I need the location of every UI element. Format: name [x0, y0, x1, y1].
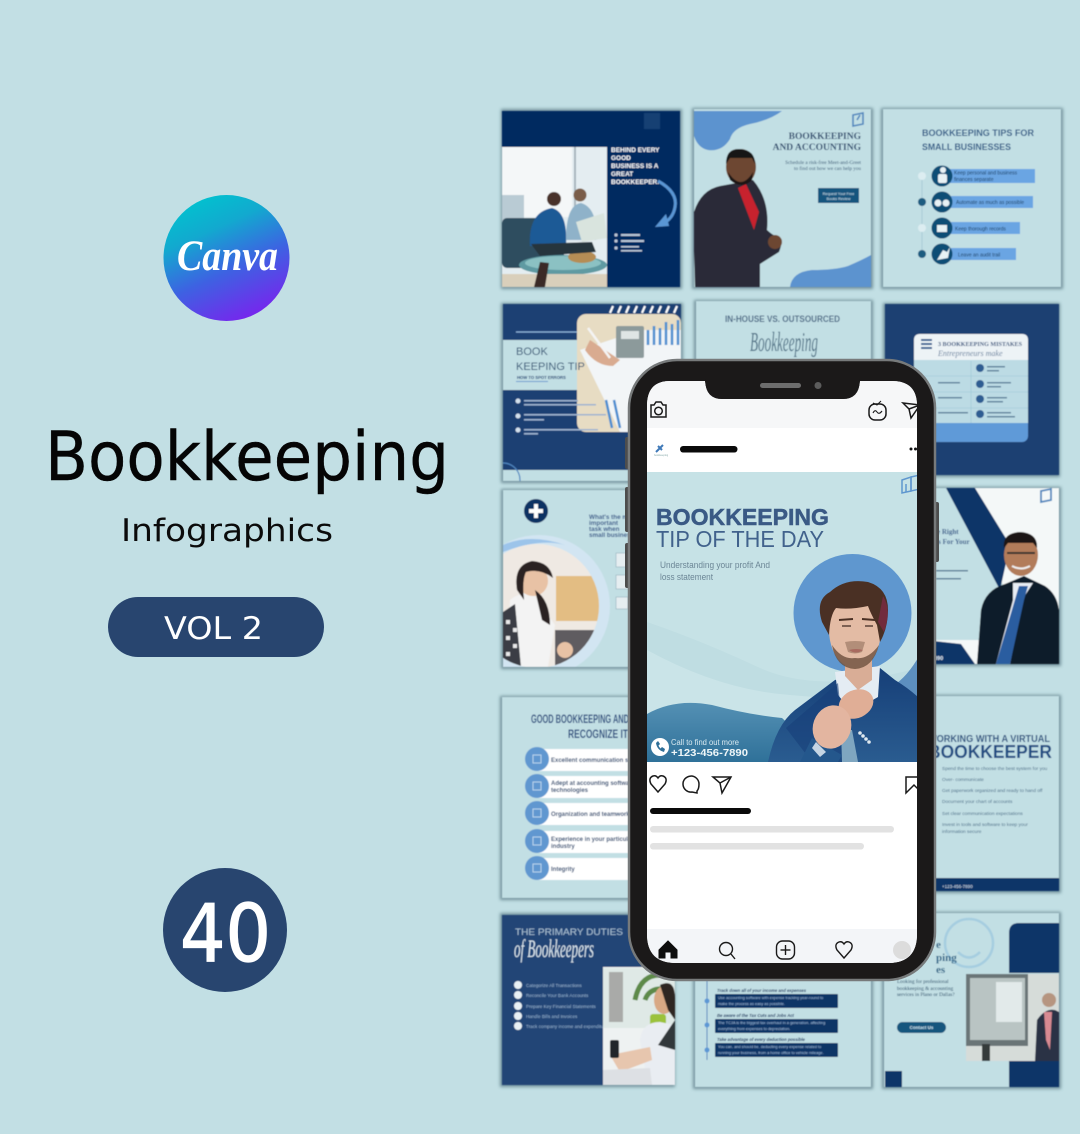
- panel: card primary duties of bookkeepers: of Bookkeepers: [514, 936, 594, 963]
- panel: card bookkeeping and accounting: to find out how we can help you: [794, 165, 861, 172]
- post header: bookkeeping: [654, 454, 669, 457]
- post image: bookkeeping tip of the day: +123-456-7890: [671, 747, 748, 759]
- icon: Canva logo badge: Canva: [177, 233, 278, 280]
- post caption placeholder bars: [650, 808, 894, 850]
- panel: card good bookkeeping recognize: technologies: [551, 788, 589, 794]
- panel: card tax tips timeline: The TCJA is the biggest tax overhaul in a generation, affecting: [718, 1020, 825, 1025]
- phone side buttons: [625, 437, 939, 588]
- panel: card behind every good business: GREAT: [611, 171, 633, 178]
- subtitle: Infographics: Infographics: [121, 513, 333, 549]
- panel: card bookkeeping and accounting: AND ACCOUNTING: [773, 143, 862, 153]
- panel: card what is the most important task: task when: [589, 526, 620, 533]
- panel: card working with a virtual bookkeeper: BOOKKEEPER: [928, 741, 1052, 762]
- panel: card choosing the right bookkeeper: e Right: [937, 528, 959, 536]
- post image: bookkeeping tip of the day: Understanding your profit And: [660, 560, 770, 570]
- panel: card what is the most important task: [502, 490, 628, 668]
- panel: card primary duties of bookkeepers: Categorize All Transactions: [526, 983, 582, 988]
- panel: card tax tips timeline: Track down all of your income and expenses: [717, 988, 807, 993]
- panel: card working with a virtual bookkeeper: Get paperwork organized and ready to hand off: [942, 788, 1043, 794]
- panel: card in-house vs outsourced: Bookkeeping: [750, 327, 818, 357]
- panel: card good bookkeeping recognize: [502, 697, 642, 898]
- panel: card good bookkeeping recognize: industry: [551, 844, 575, 850]
- panel: card in-house vs outsourced: [696, 301, 871, 401]
- panel: card what is the most important task: important: [589, 520, 619, 527]
- post image: bookkeeping tip of the day: BOOKKEEPING: [656, 504, 829, 530]
- panel: card behind every good business: BEHIND EVERY: [611, 147, 660, 154]
- card shadows: [500, 108, 1063, 1089]
- panel: card bookkeeping tips for small businesses: Keep thorough records: [955, 226, 1006, 232]
- panel: card working with a virtual bookkeeper: information secure: [942, 829, 982, 835]
- panel: card good bookkeeping recognize: GOOD BOOKKEEPING AND: [531, 714, 629, 726]
- panel: card tax tips timeline: [695, 960, 871, 1087]
- panel: card primary duties of bookkeepers: Handle Bills and Invoices: [526, 1014, 578, 1019]
- man portrait: [768, 581, 918, 762]
- title: Bookkeeping: Bookkeeping: [45, 418, 449, 497]
- panel: card bookkeeping and accounting: BOOKKEEPING: [789, 132, 862, 142]
- panel: card working with a virtual bookkeeper: Over- communicate: [942, 777, 984, 783]
- panel: card good bookkeeping recognize: Excellent communication skills: [551, 758, 641, 764]
- panel: card book keeping tips: KEEPING TIP: [516, 361, 585, 373]
- panel: card bookkeeping tips for small businesses: Keep personal and business: [954, 170, 1018, 176]
- panel: card tax tips timeline: You can, and should be, deducting every expense related to: [718, 1044, 821, 1049]
- panel: card bookkeeping tips for small businesses: Leave an audit trail: [958, 252, 1000, 258]
- panel: card 5 bookkeeping mistakes: Entrepreneurs make: [937, 349, 1003, 358]
- badge: 40 templates count: 40: [180, 888, 271, 980]
- panel: card primary duties of bookkeepers: Prepare Key Financial Statements: [526, 1004, 596, 1009]
- panel: card tax tips timeline: running your business, from a home office to vehicle mileage.: [718, 1050, 824, 1055]
- panel: card bookkeeping tips for small businesses: [883, 109, 1061, 287]
- panel: card working with a virtual bookkeeper: WORKING WITH A VIRTUAL: [928, 734, 1050, 745]
- panel: card primary duties of bookkeepers: THE PRIMARY DUTIES: [515, 927, 623, 938]
- panel: card working with a virtual bookkeeper: Invest in tools and software to keep your: [942, 822, 1028, 828]
- panel: card contact us bookkeeping services: e: [936, 939, 941, 951]
- panel: card 5 bookkeeping mistakes: [885, 304, 1059, 475]
- badge: volume 2 pill: [108, 597, 324, 657]
- panel: card primary duties of bookkeepers: Track company income and expenditures: [526, 1024, 611, 1029]
- panel: card choosing the right bookkeeper: ices For Your: [930, 538, 970, 546]
- panel: card tax tips timeline: make the process as easy as possible.: [718, 1001, 785, 1006]
- post image: bookkeeping tip of the day: loss statement: [660, 572, 714, 582]
- panel: card working with a virtual bookkeeper: Document your chart of accounts: [942, 799, 1013, 805]
- panel: card primary duties of bookkeepers: [502, 915, 675, 1085]
- phone mockup: [625, 360, 939, 980]
- panel: card good bookkeeping recognize: Integrity: [551, 867, 575, 873]
- panel: card working with a virtual bookkeeper: Set clear communication expectations: [942, 811, 1023, 817]
- panel: card behind every good business: GOOD: [611, 155, 631, 162]
- panel: card bookkeeping and accounting: Schedule a risk-free Meet-and-Greet: [785, 159, 862, 166]
- panel: card behind every good business: BOOKKEEPER.: [611, 179, 659, 186]
- post image: bookkeeping tip of the day: TIP OF THE DAY: [656, 526, 824, 552]
- panel: card tax tips timeline: everything from expenses to depreciation.: [718, 1026, 790, 1031]
- panel: card primary duties of bookkeepers: Reconcile Your Bank Accounts: [526, 993, 589, 998]
- panel: card in-house vs outsourced: IN-HOUSE VS. OUTSOURCED: [725, 314, 840, 324]
- panel: card tax tips timeline: Take advantage of every deduction possible: [717, 1037, 805, 1042]
- phone screen: [647, 378, 922, 964]
- phone notch with speaker and camera: [705, 378, 860, 399]
- panel: card bookkeeping tips for small businesses: Automate as much as possible: [956, 200, 1024, 206]
- panel: card bookkeeping and accounting: Request Your Free: [823, 192, 854, 196]
- post image: bookkeeping tip of the day: Call to find out more: [671, 738, 740, 747]
- panel: card good bookkeeping recognize: Organization and teamwork: [551, 812, 630, 818]
- panel: card 5 bookkeeping mistakes: 3 BOOKKEEPING MISTAKES: [938, 341, 1022, 348]
- panel: card bookkeeping and accounting: [693, 109, 871, 287]
- panel: card book keeping tips: HOW TO SPOT ERRORS: [517, 375, 566, 380]
- panel: card what is the most important task: What's the most: [589, 514, 638, 521]
- panel: card working with a virtual bookkeeper: [925, 696, 1059, 891]
- panel: card good bookkeeping recognize: Adept at accounting software: [551, 781, 636, 787]
- panel: card behind every good business: [502, 111, 680, 287]
- post header: [654, 444, 917, 456]
- panel: card contact us bookkeeping services: ping: [936, 952, 957, 964]
- panel: card book keeping tips: BOOK: [516, 346, 548, 358]
- panel: card working with a virtual bookkeeper: +123-456-7890: [942, 884, 973, 889]
- panel: card tax tips timeline: Use accounting software with expense tracking year-round to: [718, 995, 823, 1000]
- panel: card contact us bookkeeping services: bookkeeping & accounting: [897, 986, 954, 992]
- panel: card bookkeeping tips for small businesses: SMALL BUSINESSES: [922, 142, 1011, 152]
- panel: card tax tips timeline: Be aware of the Tax Cuts and Jobs Act: [717, 1013, 795, 1018]
- panel: card good bookkeeping recognize: RECOGNIZE IT: [568, 729, 628, 741]
- instagram top bar: [647, 378, 920, 428]
- panel: card working with a virtual bookkeeper: Spend the time to choose the best system for you: [942, 766, 1048, 772]
- panel: card book keeping tips: [502, 303, 682, 482]
- panel: card contact us bookkeeping services: services in Plano or Dallas?: [897, 992, 955, 998]
- post action icons: [650, 776, 922, 793]
- badge: volume 2 pill: VOL 2: [164, 611, 263, 647]
- panel: card what is the most important task: small business: [589, 532, 635, 539]
- panel: card bookkeeping and accounting: Books Review: [826, 197, 851, 201]
- panel: card good bookkeeping recognize: Experience in your particular: [551, 837, 634, 843]
- bottom navigation bar: [647, 929, 918, 964]
- icon: Canva logo badge: [164, 195, 290, 321]
- panel: card bookkeeping tips for small businesses: finances separate: [954, 177, 994, 183]
- panel: card contact us bookkeeping services: Looking for professional: [897, 978, 949, 985]
- post image: bookkeeping tip of the day: [647, 472, 920, 762]
- panel: card choosing the right bookkeeper: 890: [934, 656, 943, 662]
- panel: card contact us bookkeeping services: es: [936, 964, 946, 976]
- badge: 40 templates count: [163, 868, 287, 992]
- panel: card bookkeeping tips for small businesses: BOOKKEEPING TIPS FOR: [922, 128, 1034, 138]
- panel: card contact us bookkeeping services: Contact Us: [910, 1025, 934, 1030]
- panel: card choosing the right bookkeeper: [925, 488, 1059, 664]
- panel: card contact us bookkeeping services: [884, 913, 1059, 1087]
- panel: card behind every good business: BUSINESS IS A: [611, 163, 659, 170]
